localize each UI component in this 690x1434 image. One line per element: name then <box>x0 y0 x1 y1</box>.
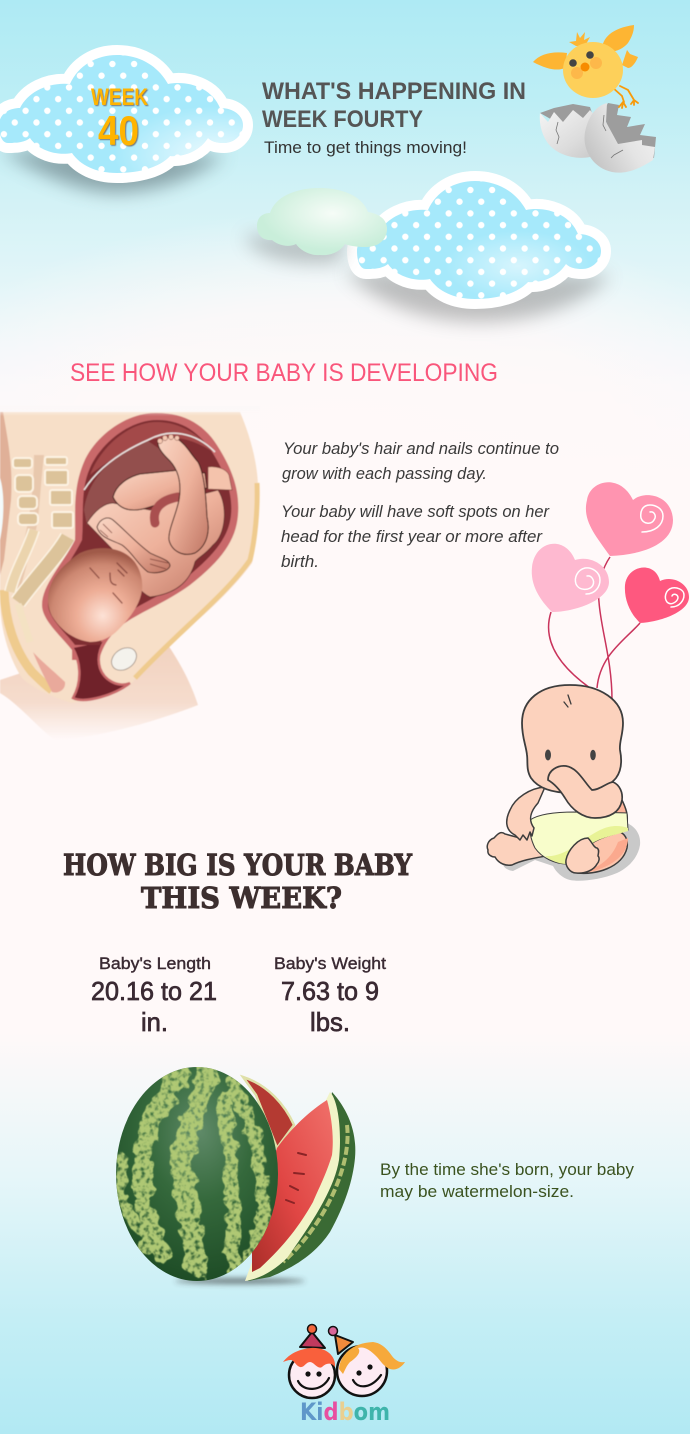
mid wall shading <box>84 441 190 525</box>
thigh <box>113 470 207 510</box>
logo wordmark: Kidbom <box>300 1398 390 1426</box>
left child <box>283 1324 335 1398</box>
right child <box>328 1326 405 1396</box>
cloud: small mint <box>245 188 387 263</box>
abdomen <box>0 412 258 703</box>
heading: how big is your baby: THIS WEEK? <box>141 881 342 915</box>
back arm edge <box>612 798 627 825</box>
arm and hand <box>97 518 170 573</box>
text block: watermelon size comparison <box>380 1161 635 1201</box>
front foot <box>566 838 599 873</box>
uterus wall <box>42 413 238 660</box>
back edge <box>0 412 12 575</box>
title block <box>262 78 526 157</box>
illustration: watermelon <box>116 1067 355 1284</box>
heart balloon: medium pink <box>586 482 673 556</box>
heart balloon: bright pink <box>625 567 689 623</box>
stat: baby's weight: Baby's Weight <box>274 955 386 973</box>
heading: see how your baby is developing: SEE HOW YOUR BABY IS DEVELOPING <box>70 359 498 387</box>
fetal head <box>48 548 142 642</box>
chick cheeks <box>571 57 602 79</box>
vaginal canal <box>72 640 130 700</box>
fetal face <box>90 563 127 603</box>
slice flesh <box>252 1100 333 1272</box>
left leg and foot <box>487 822 546 865</box>
right egg shell <box>585 103 656 173</box>
cloud badge: week 40 <box>0 55 243 193</box>
balloon spirals <box>575 505 684 607</box>
chick crest <box>569 32 590 46</box>
slice outer rind <box>248 1092 355 1281</box>
text block: baby development facts <box>281 440 559 571</box>
title second line: WEEK FOURTY <box>262 106 423 133</box>
diaper <box>530 812 628 864</box>
chick body <box>563 42 623 98</box>
heading: how big is your baby <box>63 848 412 915</box>
cloud: decorative dotted <box>345 181 610 322</box>
leg and foot <box>158 437 208 554</box>
text block: baby development facts: Your baby's hair and nails continue to <box>283 440 559 458</box>
spine shadow <box>12 455 44 590</box>
slice rind stripes <box>283 1125 348 1262</box>
chick legs <box>612 86 638 108</box>
text block: watermelon size comparison: may be watermelon-size. <box>380 1183 574 1201</box>
stat: baby's weight: lbs. <box>310 1007 350 1037</box>
umbilical cord <box>154 497 178 523</box>
baby shadow <box>503 823 640 881</box>
arm to mouth <box>548 766 622 818</box>
back rind piece <box>243 1077 294 1148</box>
lower body <box>0 645 198 740</box>
text block: baby development facts: grow with each passing day. <box>282 465 487 483</box>
spine column <box>10 457 73 642</box>
stat: baby's length: Baby's Length <box>99 955 211 973</box>
stat: baby's weight <box>274 955 386 1037</box>
balloon strings <box>549 557 640 700</box>
icon: baby holding heart balloons <box>487 482 689 881</box>
ground shadow <box>175 1278 305 1284</box>
flesh seeds <box>286 1153 306 1203</box>
text block: baby development facts: head for the first year or more after <box>281 528 544 546</box>
toes <box>157 434 179 444</box>
uterine cavity <box>48 420 231 645</box>
subtitle: Time to get things moving! <box>264 138 467 157</box>
stat: baby's weight: 7.63 to 9 <box>281 976 379 1006</box>
pubic bone <box>107 643 141 675</box>
logo: kidbom <box>283 1324 405 1426</box>
stat: baby's length: 20.16 to 21 <box>91 976 217 1006</box>
finger lines <box>100 524 168 569</box>
chick beak <box>580 62 590 72</box>
heart balloon: light pink <box>532 544 609 612</box>
left egg shell <box>540 104 606 158</box>
stat: baby's length: in. <box>141 1007 168 1037</box>
arm on knee <box>507 787 545 840</box>
chick wings <box>533 25 638 70</box>
icon: chick hatching from egg <box>533 25 656 173</box>
stat: baby's length <box>91 955 217 1037</box>
fat layer right <box>135 483 257 678</box>
week number: 40 <box>98 107 139 154</box>
top fade <box>0 406 260 416</box>
fat layer left <box>4 590 52 690</box>
melon body <box>116 1067 278 1281</box>
slice white rind <box>245 1092 340 1281</box>
text block: baby development facts: Your baby will have soft spots on her <box>281 503 550 521</box>
perineum <box>33 652 65 693</box>
torso <box>87 490 224 597</box>
hair tuft <box>564 695 571 707</box>
chick eyes <box>569 51 594 67</box>
title: WHAT'S HAPPENING IN <box>262 78 526 105</box>
week label: WEEK <box>91 84 149 111</box>
eyes <box>545 750 596 760</box>
right leg <box>566 830 627 873</box>
melon stripes <box>120 1073 263 1274</box>
placenta <box>90 422 213 475</box>
heading: how big is your baby: HOW BIG IS YOUR BABY <box>63 848 412 882</box>
illustration: baby in womb cross-section <box>0 406 260 740</box>
text block: watermelon size comparison: By the time she's born, your baby <box>380 1161 635 1179</box>
text block: baby development facts: birth. <box>281 553 319 571</box>
head <box>522 685 623 793</box>
back foot <box>208 467 232 490</box>
